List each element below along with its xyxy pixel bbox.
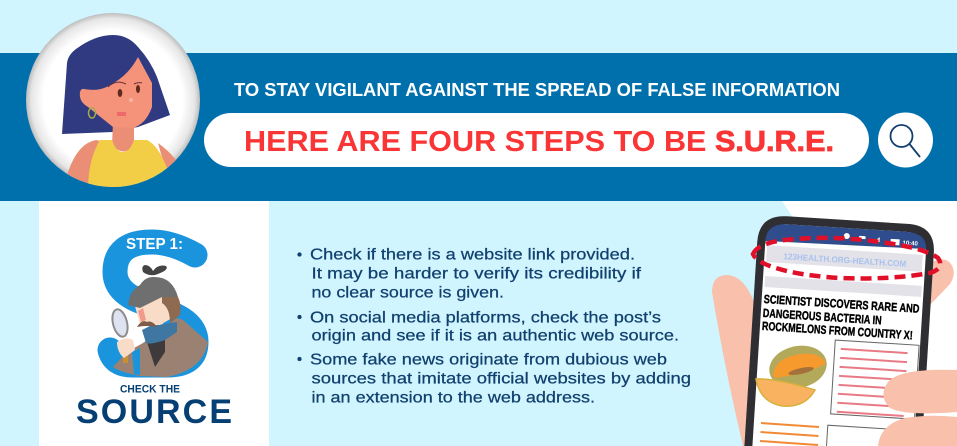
headline pill (204, 113, 869, 167)
header subtitle: TO STAY VIGILANT AGAINST THE SPREAD OF FALSE INFORMATION (234, 80, 840, 100)
big letter S (110, 242, 196, 365)
icon: detective (110, 265, 208, 377)
bullet 3: Some fake news originate from dubious web (310, 351, 667, 368)
label: source: SOURCE (76, 393, 232, 431)
article headline: DANGEROUS BACTERIA IN (762, 306, 882, 327)
bullet 2 (298, 309, 679, 345)
avatar: woman in circle (26, 13, 200, 190)
headline text: HERE ARE FOUR STEPS TO BE S.U.R.E. (244, 126, 834, 158)
status icons: 10:40 (902, 241, 919, 248)
red dashed highlight around url (753, 238, 940, 278)
bullet 3: sources that imitate official websites by adding (312, 370, 691, 387)
bullet 3: in an extension to the web address. (312, 389, 595, 406)
icon: rockmelon (756, 340, 831, 406)
header band (0, 53, 957, 201)
orange text lines (760, 423, 819, 445)
hand fingers over phone (878, 370, 957, 446)
bullet 2: origin and see if it is an authentic web source. (312, 328, 679, 345)
hand behind phone (712, 259, 954, 446)
address bar (766, 245, 923, 272)
second article box (826, 425, 912, 446)
article headline (762, 292, 920, 343)
status icons (843, 233, 919, 248)
label: check the: CHECK THE (120, 384, 180, 396)
bullet 1: no clear source is given. (312, 285, 504, 302)
bullet 3 (298, 351, 691, 406)
url text: 123HEALTH.ORG-HEALTH.COM (783, 251, 907, 269)
status bar (765, 224, 926, 249)
white background behind phone (782, 201, 957, 446)
bullet 1 (298, 247, 642, 302)
bullet 2: On social media platforms, check the post’s (310, 309, 661, 326)
phone (744, 216, 934, 446)
bullet list (298, 247, 691, 406)
step label: STEP 1: (126, 236, 183, 253)
article text box (831, 340, 919, 419)
bullet 1: It may be harder to verify its credibility if (312, 266, 642, 283)
panel: step 1 (39, 201, 269, 446)
icon: search magnifier (878, 112, 933, 168)
bullet 1: Check if there is a website link provided. (310, 247, 635, 264)
